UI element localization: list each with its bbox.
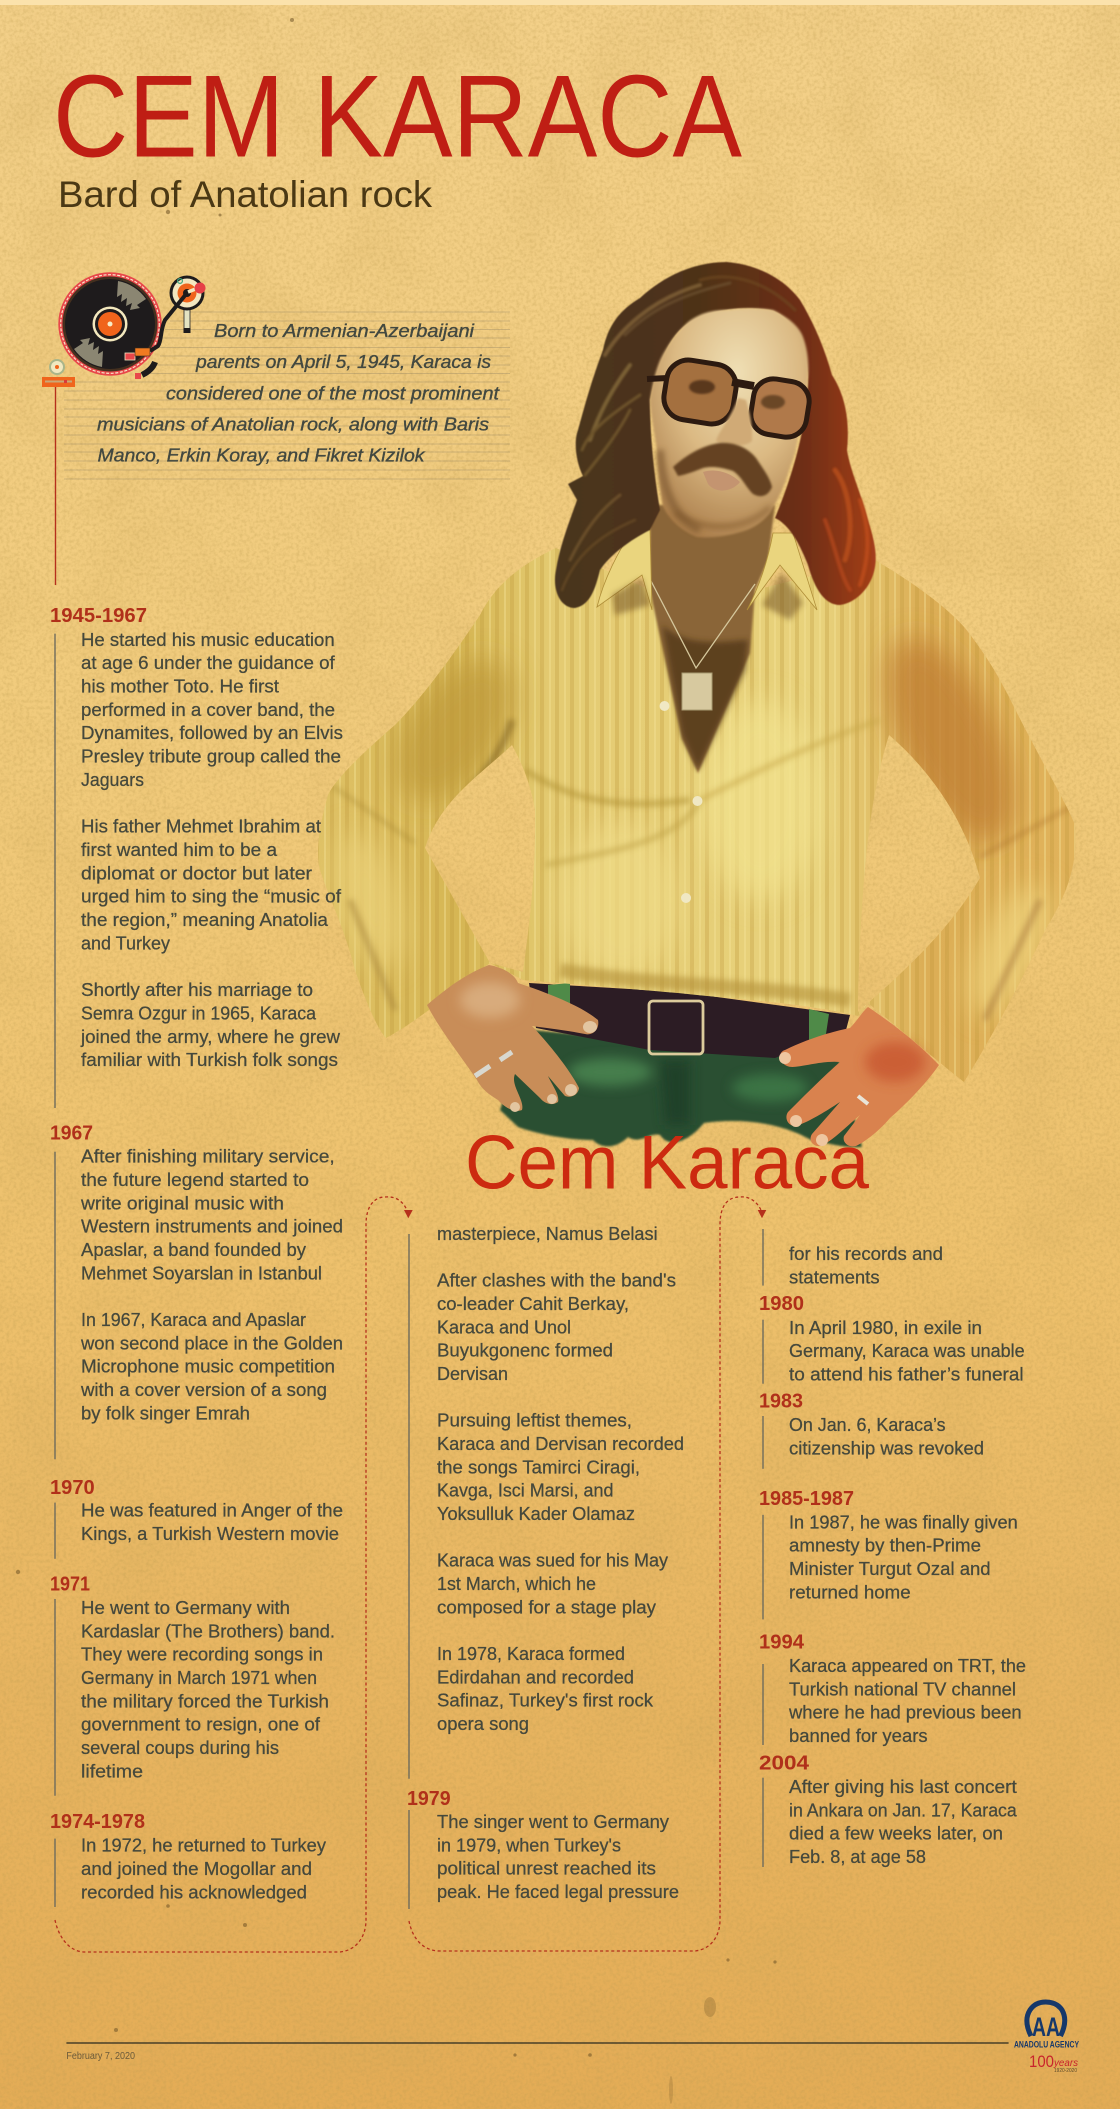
timeline entry: 1974-1978 continued: Karaca and Dervisan recorded — [437, 1434, 684, 1454]
timeline entry: 2004 — [759, 1753, 1018, 1867]
portrait caption: Cem Karaca: Cem Karaca — [465, 1121, 870, 1206]
tonearm base — [170, 276, 206, 333]
timeline entry: 1945-1967: his mother Toto. He first — [81, 676, 279, 696]
intro text: Born to Armenian-Azerbaijani — [214, 320, 475, 341]
timeline entry: 1974-1978: 1974-1978 — [50, 1811, 145, 1833]
timeline entry: 1974-1978 continued: co-leader Cahit Berkay, — [437, 1294, 629, 1314]
timeline entry: 1985-1987: amnesty by then-Prime — [789, 1536, 981, 1556]
timeline entry: 1945-1967: first wanted him to be a — [81, 840, 278, 860]
timeline entry: 1983 — [759, 1390, 984, 1469]
timeline entry: 2004: After giving his last concert — [789, 1777, 1017, 1797]
timeline entry: 1985-1987: In 1987, he was finally given — [789, 1512, 1018, 1532]
moustache — [673, 443, 772, 496]
timeline entry: 1970: 1970 — [50, 1477, 95, 1499]
timeline entry: 1983: On Jan. 6, Karaca’s — [789, 1415, 946, 1435]
ring — [858, 1096, 868, 1104]
timeline entry: 1971 — [50, 1574, 335, 1796]
timeline entry: 1974-1978 continued: Karaca and Unol — [437, 1317, 571, 1337]
timeline entry: 1945-1967: and Turkey — [81, 933, 170, 953]
timeline entry: 1994: Karaca appeared on TRT, the — [789, 1656, 1026, 1676]
timeline entry: 1980: 1980 — [759, 1293, 804, 1315]
timeline entry: 1974-1978 continued: Edirdahan and recorded — [437, 1667, 634, 1687]
chest and neck — [650, 505, 775, 773]
arrow: continue to column 2 — [55, 1197, 413, 1952]
cartridge — [125, 353, 135, 360]
belt loops — [548, 983, 829, 1040]
timeline entry: 1974-1978 continued: In 1978, Karaca formed — [437, 1644, 625, 1664]
timeline entry: 1974-1978: and joined the Mogollar and — [81, 1859, 312, 1879]
timeline entry: 1974-1978 continued: Karaca was sued for his May — [437, 1551, 668, 1571]
timeline entry: 1974-1978 continued: Pursuing leftist themes, — [437, 1411, 632, 1431]
timeline entry: 1967: by folk singer Emrah — [81, 1403, 250, 1423]
timeline entry: 1945-1967: His father Mehmet Ibrahim at — [81, 817, 321, 837]
logo: Anadolu Agency: AA — [1032, 2012, 1060, 2042]
timeline entry: 1971: They were recording songs in — [81, 1645, 323, 1665]
timeline entry: 1967: 1967 — [50, 1122, 93, 1144]
timeline entry: 1970 — [50, 1477, 343, 1559]
logo: Anadolu Agency: 100 — [1029, 2052, 1054, 2071]
shirt buttons — [660, 701, 702, 903]
intro text: parents on April 5, 1945, Karaca is — [195, 351, 491, 372]
stubble shadow — [660, 450, 700, 530]
timeline entry: 1971: Germany in March 1971 when — [81, 1668, 317, 1688]
timeline entry: 1971: several coups during his — [81, 1738, 279, 1758]
intro text: considered one of the most prominent — [166, 382, 500, 404]
timeline entry: 1967: Apaslar, a band founded by — [81, 1240, 306, 1260]
timeline entry: 2004: in Ankara on Jan. 17, Karaca — [789, 1800, 1018, 1820]
timeline entry: 2004: died a few weeks later, on — [789, 1824, 1003, 1844]
timeline entry: 1994: 1994 — [759, 1632, 805, 1654]
timeline entry: 1994 — [759, 1632, 1026, 1746]
hair strands — [562, 277, 868, 590]
timeline entry: 1980 — [759, 1293, 1025, 1384]
intro timeline marker — [42, 359, 75, 585]
timeline entry: 1967: Microphone music competition — [81, 1357, 335, 1377]
timeline entry: 1971: government to resign, one of — [81, 1715, 321, 1735]
timeline entry: 1974-1978: In 1972, he returned to Turkey — [81, 1836, 326, 1856]
timeline entry: 1945-1967 — [50, 605, 343, 1108]
timeline entry: 1994: banned for years — [789, 1726, 928, 1746]
timeline entry: 1985-1987: 1985-1987 — [759, 1488, 854, 1510]
footer date: February 7, 2020 — [66, 2051, 135, 2062]
pendant — [682, 673, 712, 710]
belt — [529, 983, 850, 1058]
timeline entry: 1974-1978 continued: After clashes with the band's — [437, 1271, 676, 1291]
timeline entry: 1985-1987 — [759, 1488, 1018, 1619]
timeline entry: 1974-1978 continued: opera song — [437, 1714, 529, 1734]
shirt — [300, 530, 1100, 1100]
timeline entry: 1974-1978 continued: Kavga, Isci Marsi, and — [437, 1481, 614, 1501]
timeline entry: 1945-1967: performed in a cover band, the — [81, 700, 335, 720]
intro text: musicians of Anatolian rock, along with Baris — [97, 414, 489, 434]
nose — [716, 398, 752, 446]
timeline entry: 1971: He went to Germany with — [81, 1598, 290, 1618]
chin shadow — [675, 507, 770, 526]
timeline entry: 1945-1967: Shortly after his marriage to — [81, 980, 313, 1000]
timeline entry: 1945-1967: diplomat or doctor but later — [81, 863, 312, 883]
timeline entry: 1945-1967: Presley tribute group called the — [81, 747, 341, 767]
timeline entry: 1979 continued — [763, 1229, 943, 1287]
timeline entry: 1945-1967: 1945-1967 — [50, 605, 147, 627]
timeline entry: 1967: After finishing military service, — [81, 1147, 335, 1167]
timeline entry: 1974-1978: recorded his acknowledged — [81, 1882, 307, 1902]
collar shadows — [612, 572, 803, 620]
timeline entry: 1967: the future legend started to — [81, 1170, 309, 1190]
timeline entry: 1945-1967: Semra Ozgur in 1965, Karaca — [81, 1004, 317, 1024]
collars — [597, 523, 817, 610]
timeline entry: 1974-1978 continued: masterpiece, Namus Belasi — [437, 1224, 658, 1244]
logo: Anadolu Agency: ANADOLU AGENCY — [1014, 2039, 1079, 2050]
subtitle: Bard of Anatolian rock — [58, 174, 433, 215]
timeline entry: 1980: to attend his father’s funeral — [789, 1364, 1024, 1384]
timeline entry: 1945-1967: familiar with Turkish folk songs — [81, 1050, 338, 1070]
timeline entry: 1974-1978 continued: Yoksulluk Kader Olamaz — [437, 1504, 635, 1524]
timeline entry: 1970: Kings, a Turkish Western movie — [81, 1524, 339, 1544]
eyes — [689, 380, 715, 394]
arm rest tip — [135, 373, 141, 379]
timeline entry: 1980: Germany, Karaca was unable — [789, 1341, 1025, 1361]
timeline entry: 1979 continued: statements — [789, 1267, 880, 1287]
timeline entry: 1983: citizenship was revoked — [789, 1439, 984, 1459]
timeline entry: 1971: 1971 — [50, 1574, 90, 1596]
headshell — [135, 348, 150, 356]
timeline entry: 1974-1978 continued: Safinaz, Turkey's first rock — [437, 1691, 654, 1711]
trousers highlights — [568, 1058, 808, 1125]
timeline entry: 1979: peak. He faced legal pressure — [437, 1882, 679, 1902]
timeline entry: 1980: In April 1980, in exile in — [789, 1318, 982, 1338]
arm rest — [142, 362, 155, 375]
logo: Anadolu Agency — [1014, 2002, 1079, 2074]
tonearm — [150, 293, 187, 351]
shirt shading — [323, 620, 1067, 1026]
timeline entry: 1979: The singer went to Germany — [437, 1812, 669, 1832]
timeline entry: 1945-1967: Dynamites, followed by an Elvis — [81, 723, 343, 743]
timeline entry: 1967: In 1967, Karaca and Apaslar — [81, 1310, 306, 1330]
timeline entry: 1974-1978 continued — [409, 1224, 684, 1779]
timeline entry: 1945-1967: joined the army, where he grew — [80, 1027, 341, 1047]
face — [650, 308, 808, 537]
timeline entry: 1974-1978 continued: Buyukgonenc formed — [437, 1341, 613, 1361]
timeline entry: 1945-1967: urged him to sing the “music of — [81, 887, 342, 907]
timeline entry: 1971: Kardaslar (The Brothers) band. — [81, 1621, 335, 1641]
timeline entry: 1979: political unrest reached its — [437, 1859, 656, 1879]
timeline entry: 2004: Feb. 8, at age 58 — [789, 1847, 926, 1867]
timeline entry: 1979 continued: for his records and — [789, 1244, 943, 1264]
necklace chain — [650, 579, 755, 668]
portrait of Cem Karaca — [300, 262, 1100, 1147]
chest hair — [662, 625, 748, 770]
hair — [555, 262, 876, 608]
timeline entry: 1945-1967: the region,” meaning Anatolia — [81, 910, 329, 930]
timeline entry: 1985-1987: Minister Turgut Ozal and — [789, 1559, 991, 1579]
timeline entry: 1985-1987: returned home — [789, 1582, 911, 1602]
timeline entry: 1970: He was featured in Anger of the — [81, 1501, 343, 1521]
timeline entry: 1974-1978 continued: composed for a stage play — [437, 1597, 656, 1617]
timeline entry: 2004: 2004 — [759, 1753, 810, 1775]
timeline entry: 1994: Turkish national TV channel — [789, 1679, 1016, 1699]
timeline entry: 1945-1967: at age 6 under the guidance of — [81, 653, 336, 673]
timeline entry: 1971: lifetime — [81, 1761, 143, 1781]
intro text: Manco, Erkin Koray, and Fikret Kizilok — [98, 444, 426, 466]
timeline entry: 1967: Mehmet Soyarslan in Istanbul — [81, 1263, 322, 1283]
timeline entry: 1979 — [407, 1788, 679, 1909]
left hand — [427, 965, 598, 1112]
timeline entry: 1979: in 1979, when Turkey's — [437, 1835, 621, 1855]
timeline entry: 1967: with a cover version of a song — [80, 1380, 327, 1400]
timeline entry: 1967: won second place in the Golden — [80, 1333, 343, 1353]
timeline entry: 1974-1978 continued: 1st March, which he — [437, 1574, 596, 1594]
timeline entry: 1967 — [50, 1122, 343, 1459]
vinyl record — [58, 272, 162, 376]
title: CEM KARACA — [53, 50, 742, 182]
rings — [475, 1052, 512, 1076]
timeline entry: 1974-1978 continued: Dervisan — [437, 1364, 508, 1384]
timeline entry: 1974-1978 — [50, 1811, 326, 1907]
timeline entry: 1979: 1979 — [407, 1788, 451, 1810]
timeline entry: 1967: write original music with — [80, 1193, 284, 1213]
timeline entry: 1983: 1983 — [759, 1390, 803, 1412]
footer rule — [66, 2042, 1009, 2044]
arrow: continue to column 3 — [409, 1197, 766, 1951]
mouth — [703, 470, 740, 491]
timeline entry: 1945-1967: Jaguars — [81, 770, 144, 790]
intro text — [97, 320, 500, 466]
timeline entry: 1994: where he had previous been — [788, 1703, 1022, 1723]
timeline entry: 1967: Western instruments and joined — [81, 1217, 343, 1237]
logo: Anadolu Agency: 1920-2020 — [1054, 2068, 1077, 2074]
trousers — [500, 1030, 862, 1147]
timeline entry: 1945-1967: He started his music education — [81, 630, 335, 650]
timeline entry: 1974-1978 continued: the songs Tamirci Ciragi, — [437, 1457, 640, 1477]
timeline entry: 1971: the military forced the Turkish — [81, 1691, 329, 1711]
icon: turntable — [58, 272, 205, 379]
glasses — [647, 357, 812, 440]
right hand — [779, 1007, 939, 1146]
intro staff lines — [64, 312, 510, 479]
belt buckle — [649, 1001, 703, 1054]
logo: Anadolu Agency: years — [1053, 2058, 1078, 2069]
